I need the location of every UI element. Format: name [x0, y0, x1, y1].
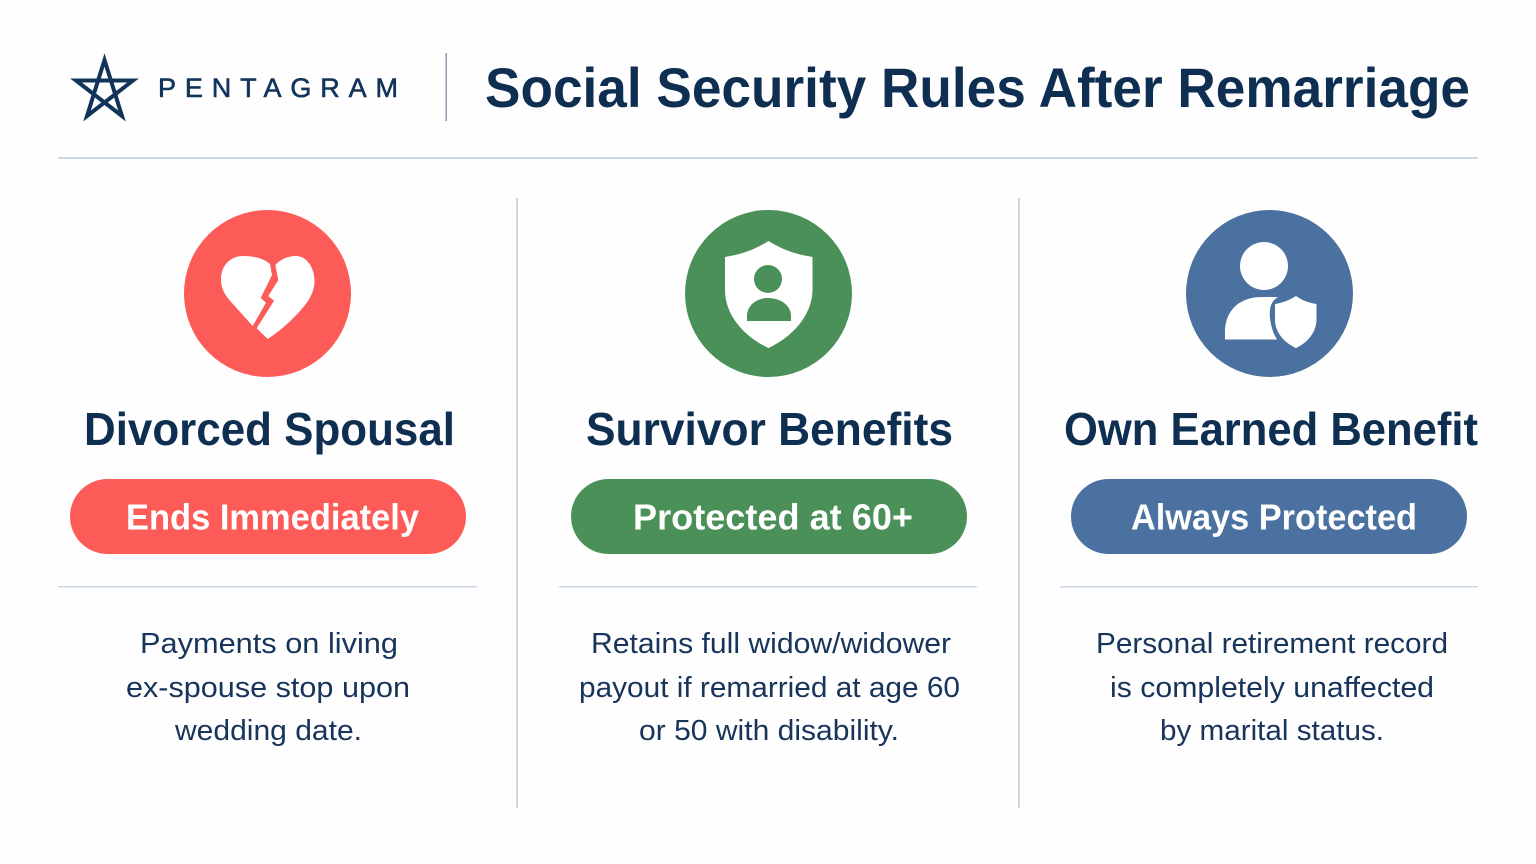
description: is completely unaffected	[1110, 672, 1434, 704]
logo: Pentagram	[76, 60, 398, 116]
status pill	[1071, 479, 1467, 554]
description: Personal retirement record	[1096, 628, 1448, 660]
title: Social Security Rules After Remarriage	[485, 56, 1470, 119]
description	[126, 628, 410, 747]
description: ex-spouse stop upon	[126, 672, 410, 704]
description	[1096, 628, 1448, 747]
panel: Survivor Benefits	[559, 210, 977, 747]
status pill	[70, 479, 466, 554]
logo wordmark: PENTAGRAM	[158, 73, 398, 103]
description: by marital status.	[1160, 715, 1384, 747]
description: payout if remarried at age 60	[579, 672, 960, 704]
status pill: Ends Immediately	[126, 496, 419, 538]
heading: Own Earned Benefit	[1064, 403, 1478, 455]
panel: Own Earned Benefit	[1060, 210, 1478, 747]
icon: person with shield	[1186, 210, 1353, 377]
description: or 50 with disability.	[639, 715, 899, 747]
status pill	[571, 479, 967, 554]
icon: shield with person	[685, 210, 852, 377]
description: wedding date.	[174, 715, 362, 747]
panel: Divorced Spousal	[58, 210, 477, 747]
icon: broken heart	[184, 210, 351, 377]
description: Payments on living	[140, 628, 398, 660]
description	[579, 628, 960, 747]
heading: Survivor Benefits	[586, 403, 953, 455]
icon: star	[76, 60, 133, 116]
status pill: Always Protected	[1131, 496, 1417, 538]
status pill: Protected at 60+	[633, 496, 913, 538]
heading: Divorced Spousal	[84, 403, 455, 455]
header divider	[446, 53, 447, 121]
description: Retains full widow/widower	[591, 628, 951, 660]
